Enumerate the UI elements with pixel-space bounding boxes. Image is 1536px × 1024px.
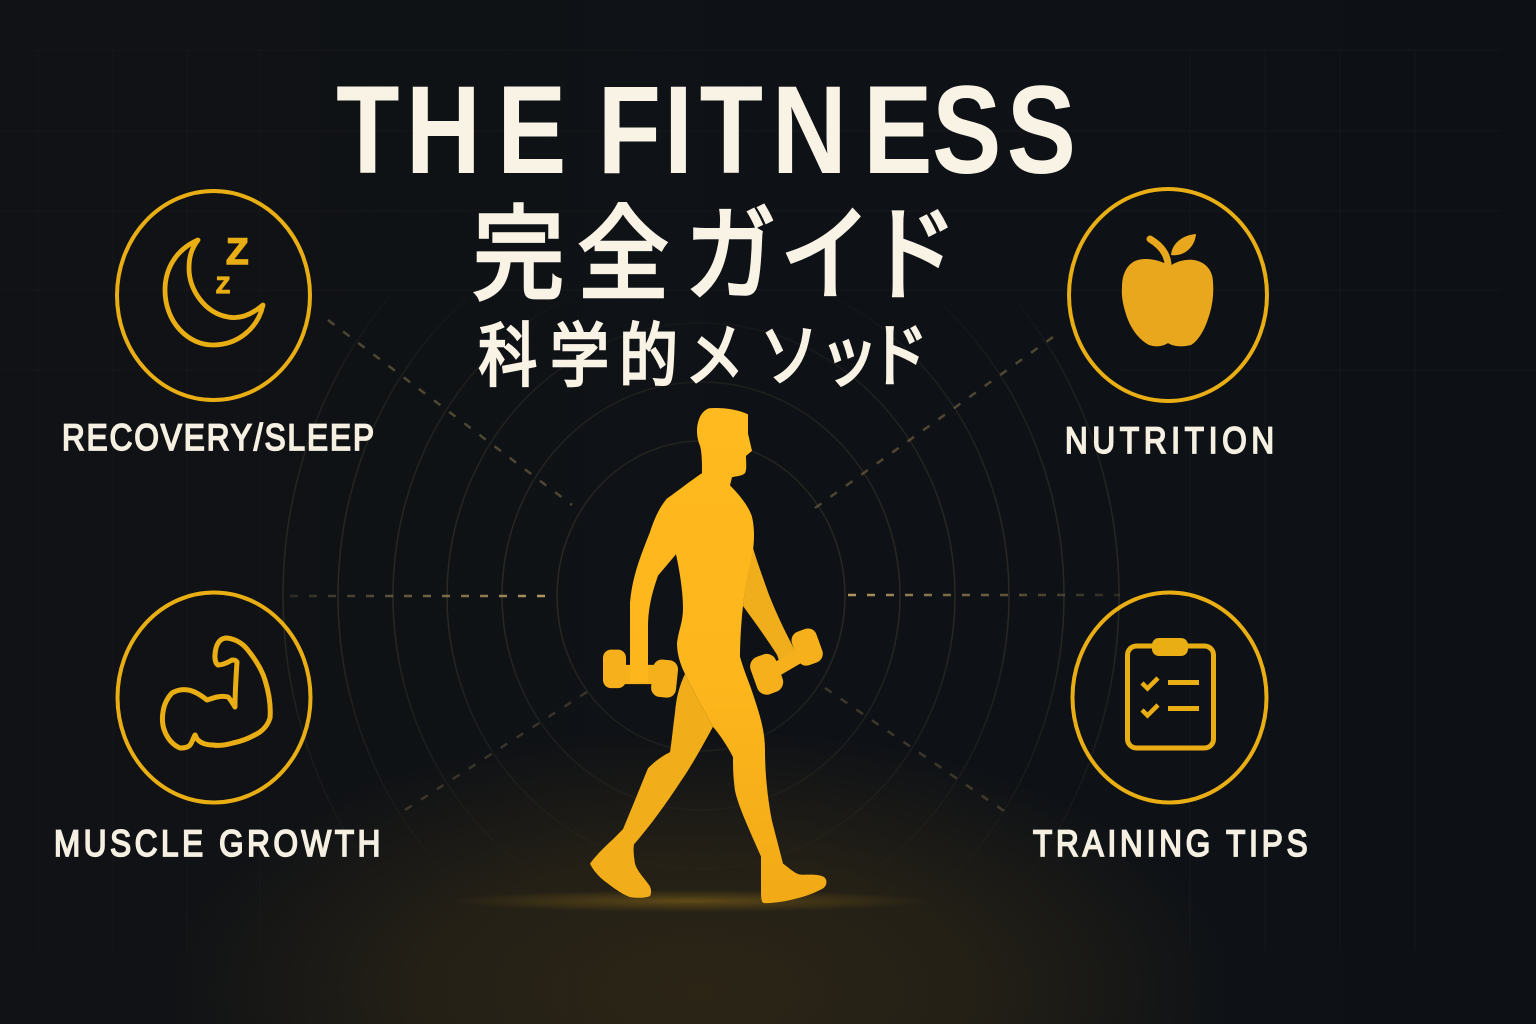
label: recovery/sleep: RECOVERY/SLEEP [62,418,374,459]
label: muscle growth: MUSCLE GROWTH [54,824,380,865]
main body [630,408,826,903]
icon ring: training [1072,592,1266,802]
icon ring: muscle [118,592,310,802]
dashed connectors [290,320,1120,815]
icon: flexed bicep [162,638,270,748]
figure: walking person with dumbbells [590,408,826,903]
label: nutrition: NUTRITION [1065,421,1274,462]
subtitle: 科学的メソッド: 科学的メソッド [478,318,928,395]
icon: crescent moon [165,240,263,345]
panel: recovery / sleep [62,191,374,459]
icon: clipboard checklist [1128,638,1214,748]
icon: small z: Z [216,272,230,298]
concentric rings [283,147,1119,1024]
label: training tips: TRAINING TIPS [1033,824,1308,865]
panel: muscle growth [54,592,380,865]
panel: training tips [1033,592,1308,865]
right dumbbell [747,626,825,698]
icon ring: recovery [117,191,310,400]
title: THE FITNESS: THE FITNESS [336,61,1076,200]
icon: apple [1122,234,1213,346]
back leg [590,674,713,898]
floor light streak [450,890,930,912]
panel: nutrition [1065,189,1274,462]
back arm [743,548,798,672]
icon: large z: Z [226,231,249,272]
left dumbbell [603,650,679,699]
icon ring: nutrition [1069,189,1267,401]
title: 完全ガイド: 完全ガイド [473,198,958,313]
